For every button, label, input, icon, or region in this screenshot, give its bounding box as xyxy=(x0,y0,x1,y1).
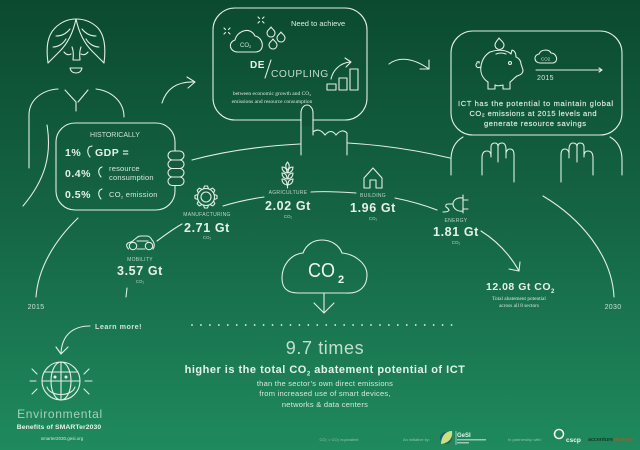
sector: building: BUILDING xyxy=(360,193,386,199)
supporting text: than the sector’s own direct emissions xyxy=(257,379,393,388)
icon: plug xyxy=(443,195,468,213)
sector: manufacturing xyxy=(183,186,231,240)
sector: agriculture: 2.02 Gt xyxy=(265,199,311,213)
supporting text xyxy=(257,379,393,409)
arrow: decoupling to ICT xyxy=(389,59,429,69)
ICT statement: CO₂ emissions at 2015 levels and xyxy=(470,109,596,118)
sector: building: CO₂ xyxy=(369,216,378,221)
icon: hands holding ICT panel xyxy=(451,137,622,182)
ICT statement: ICT has the potential to maintain global xyxy=(458,99,613,108)
arrow: to total abatement xyxy=(481,231,520,271)
icon: piggy bank with coin xyxy=(476,38,523,89)
resource statistic: 0.4% xyxy=(65,168,91,180)
icon: CO2 cloud with drops xyxy=(224,17,285,52)
ICT statement xyxy=(458,99,613,128)
icon: fingers holding card xyxy=(168,151,184,186)
sector: mobility: 3.57 Gt xyxy=(117,264,163,278)
website: smarter2030.gesi.org xyxy=(41,436,84,441)
sector: building: 1.96 Gt xyxy=(350,201,396,215)
timeline arcs xyxy=(36,196,614,297)
initiative credit xyxy=(403,431,486,445)
ICT statement: generate resource savings xyxy=(484,119,586,128)
label: 2030: 2030 xyxy=(605,304,621,311)
decoupling wordmark xyxy=(250,60,329,80)
total abatement callout xyxy=(486,281,555,309)
key statement: abatement potential of ICT xyxy=(311,364,465,376)
panel: historically xyxy=(56,123,175,210)
sector: energy: 1.81 Gt xyxy=(433,225,479,239)
sector: building xyxy=(350,168,396,221)
panel: ICT potential xyxy=(451,31,622,135)
sector: energy: CO₂ xyxy=(452,240,460,245)
icon: smiling globe xyxy=(30,362,92,400)
key statistic: 9.7 times xyxy=(286,338,364,358)
total abatement callout: Total abatement potential xyxy=(492,296,546,302)
decoupling wordmark: COUPLING xyxy=(271,69,329,80)
GDP statistic: 1% xyxy=(65,147,81,159)
sector: mobility: MOBILITY xyxy=(127,257,153,263)
icon: gear xyxy=(195,186,217,208)
emission statistic: CO xyxy=(109,190,121,199)
connectors between sectors xyxy=(157,192,437,241)
emission statistic: 2 xyxy=(121,194,124,200)
icon: rising bar chart xyxy=(327,58,358,90)
sector: agriculture: AGRICULTURE xyxy=(269,190,308,196)
emission statistic: 0.5% xyxy=(65,189,91,201)
horizon arc xyxy=(192,143,450,160)
resource statistic xyxy=(65,164,154,182)
decoupling description: emissions and resource consumption xyxy=(232,99,313,105)
panel heading: HISTORICALLY xyxy=(90,132,140,139)
arrow: learn more xyxy=(56,326,90,354)
icon: small CO2 cloud xyxy=(535,50,557,63)
total abatement callout: across all 8 sectors xyxy=(499,303,539,309)
decoupling description: between economic growth and CO₂ xyxy=(233,91,311,97)
sector: agriculture: CO₂ xyxy=(284,214,292,219)
sector: agriculture xyxy=(265,162,311,219)
logo: GeSI: GeSI xyxy=(457,433,471,439)
icon: CO2 cloud with drops: 2 xyxy=(249,44,252,49)
sector: energy: ENERGY xyxy=(445,218,468,224)
sector: manufacturing: 2.71 Gt xyxy=(184,221,230,235)
panel heading: Need to achieve xyxy=(291,19,345,28)
brand title: Environmental xyxy=(17,407,103,421)
supporting text: networks & data centers xyxy=(282,400,368,409)
label: 2015: 2015 xyxy=(28,304,44,311)
emission statistic: emission xyxy=(123,190,158,199)
GDP statistic xyxy=(65,146,129,159)
key statement: 2 xyxy=(307,372,311,378)
panel: decoupling xyxy=(213,8,367,120)
decoupling description xyxy=(232,91,313,105)
icon: pointing hand xyxy=(301,105,347,155)
initiative credit: An initiative by: xyxy=(403,437,430,442)
supporting text: from increased use of smart devices, xyxy=(259,389,391,398)
resource statistic: consumption xyxy=(109,173,154,182)
timeline arrow: 2015 xyxy=(537,75,554,82)
icon: wheat xyxy=(282,162,293,188)
timeline arrow xyxy=(536,68,602,82)
person illustration xyxy=(23,19,124,206)
decoupling wordmark: DE xyxy=(250,60,265,71)
logo: accenture: accenturestrategy xyxy=(588,437,635,443)
sector: mobility xyxy=(117,236,163,284)
partnership credit: In partnership with: xyxy=(508,437,542,442)
icon: CO2 cloud with down arrow: 2 xyxy=(338,274,344,286)
sector: mobility: CO₂ xyxy=(136,279,144,284)
icon: CO2 cloud with down arrow: CO xyxy=(308,260,335,282)
sector: manufacturing: CO₂ xyxy=(203,235,212,240)
brand subtitle: Benefits of SMARTer2030 xyxy=(17,424,101,431)
sector: manufacturing: MANUFACTURING xyxy=(183,212,231,218)
emission statistic xyxy=(65,189,158,201)
footnote: CO₂ = CO₂ equivalent xyxy=(319,437,359,442)
learn more link: Learn more! xyxy=(95,322,142,331)
dotted divider xyxy=(192,324,452,326)
key statement: higher is the total CO xyxy=(185,364,307,376)
resource statistic: resource xyxy=(109,164,140,173)
arrow: up to decoupling xyxy=(162,77,195,103)
icon: house xyxy=(364,168,382,188)
total abatement callout: 12.08 Gt CO xyxy=(486,281,551,293)
GDP statistic: GDP = xyxy=(95,147,129,159)
icon: car xyxy=(127,236,154,250)
icon: small CO2 cloud: CO2 xyxy=(541,56,551,62)
total abatement callout: 2 xyxy=(551,289,555,295)
icon: CO2 cloud with down arrow xyxy=(282,240,367,313)
icon: CO2 cloud with drops: CO xyxy=(240,43,249,49)
logo: CSCP: cscp xyxy=(566,437,581,444)
sector: energy xyxy=(433,195,479,245)
partnership credit xyxy=(508,430,635,444)
